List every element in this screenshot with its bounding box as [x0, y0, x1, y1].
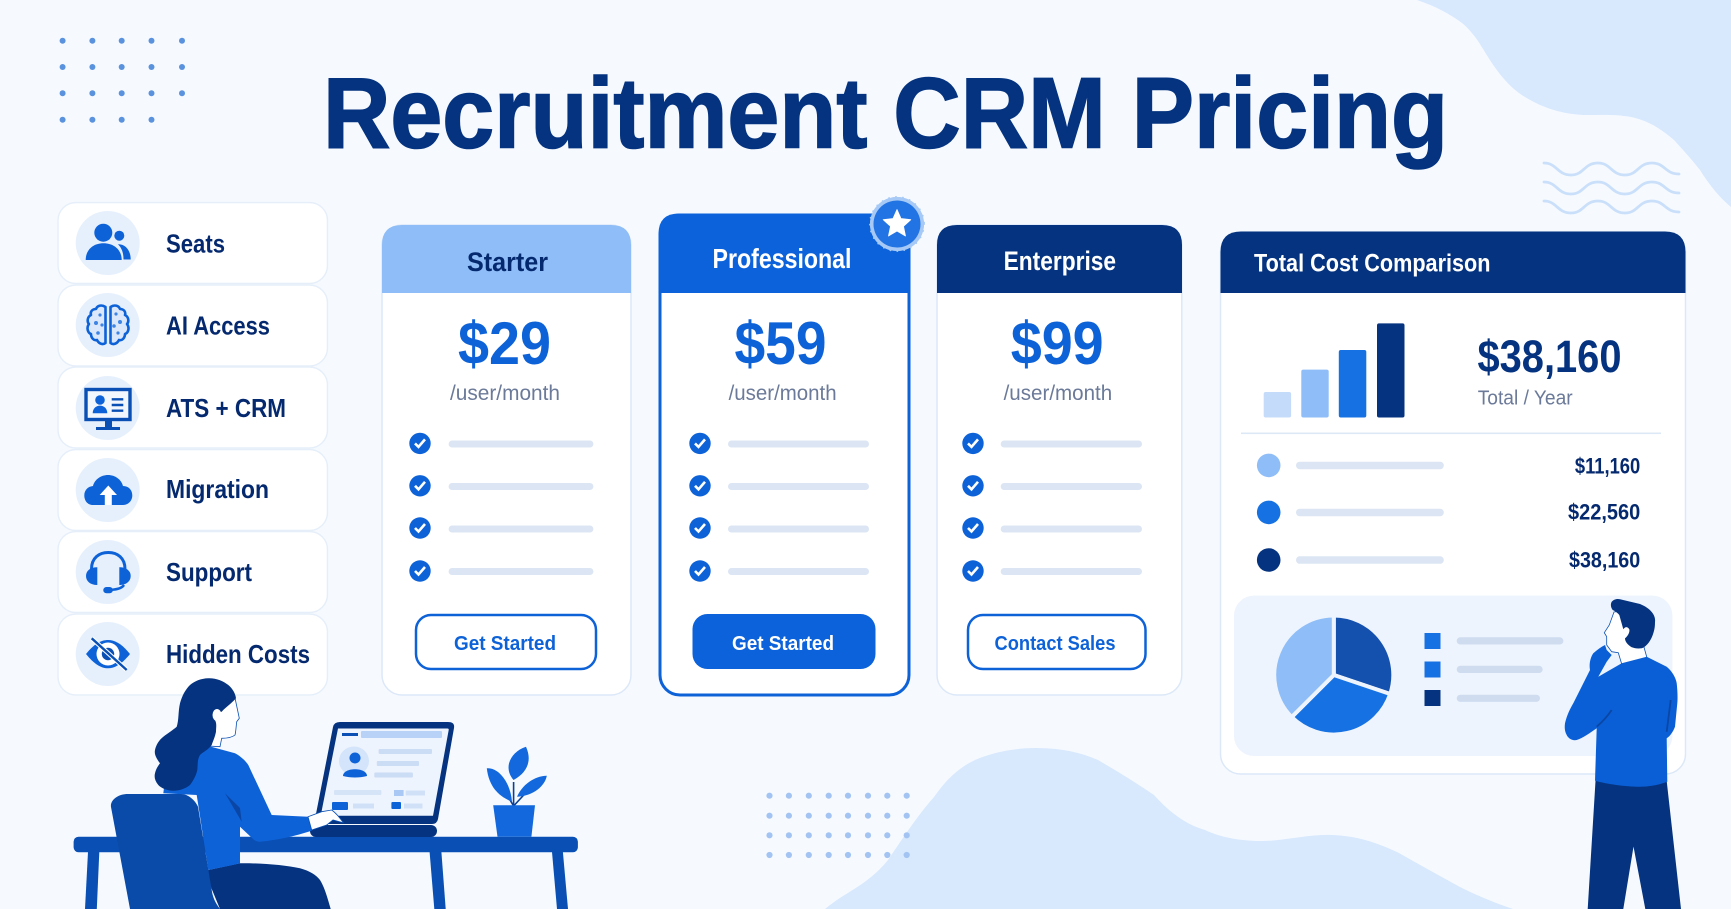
face and neck	[208, 698, 239, 747]
card: Enterprise: /user/month	[1004, 382, 1112, 405]
row: Seats: Seats	[166, 228, 225, 258]
row: AI Access	[58, 285, 328, 366]
row: AI Access: AI Access	[166, 310, 270, 340]
row: Hidden Costs: Hidden Costs	[166, 639, 310, 669]
icon: brain	[88, 306, 128, 344]
decorative dots: top left	[60, 38, 185, 123]
card: Enterprise: $99	[1011, 310, 1104, 377]
icon: people	[86, 224, 131, 260]
pie legend	[1424, 633, 1563, 706]
cost rows: $38,160	[1569, 548, 1640, 573]
row: Support: Support	[166, 557, 252, 587]
inner panel: breakdown	[1234, 596, 1672, 756]
panel: feature list	[58, 202, 328, 695]
row: ATS + CRM: ATS + CRM	[166, 393, 286, 423]
illustration: man thinking	[1565, 599, 1681, 909]
icon: monitor with profile	[86, 390, 130, 430]
panel: Total Cost Comparison: Total Cost Comparison	[1254, 249, 1490, 277]
desk	[74, 837, 578, 909]
feature checks	[689, 433, 869, 582]
total figure: Total / Year	[1478, 387, 1573, 409]
button: Get Started: Get Started	[454, 632, 556, 655]
sweater and arm	[163, 746, 312, 870]
laptop	[310, 722, 454, 837]
neck and face	[1604, 610, 1647, 664]
card: Starter	[382, 225, 631, 695]
decorative waves: top right	[1544, 163, 1679, 213]
button: Get Started: Get Started	[732, 632, 834, 655]
card: Enterprise	[937, 225, 1182, 695]
row: Migration: Migration	[166, 474, 269, 504]
total figure	[1478, 331, 1622, 409]
trousers	[1588, 781, 1681, 909]
card: Starter: Starter	[467, 247, 548, 277]
badge: star	[870, 197, 924, 251]
background blob: bottom	[825, 748, 1513, 909]
card: Professional	[658, 197, 924, 695]
row: ATS + CRM	[58, 367, 328, 448]
button: Contact Sales	[968, 615, 1146, 669]
cost rows: $11,160	[1575, 454, 1640, 479]
trousers	[208, 863, 331, 909]
background blob: top right	[1417, 0, 1731, 207]
sweater folds	[1597, 700, 1671, 732]
hair	[155, 678, 236, 791]
feature checks	[962, 433, 1142, 582]
button: Get Started	[692, 614, 876, 669]
plant	[487, 747, 547, 837]
bar chart	[1264, 323, 1404, 418]
card: Starter: /user/month	[450, 382, 560, 405]
panel: Total Cost Comparison	[1220, 232, 1686, 774]
icon: headset	[86, 552, 131, 593]
sweater and arm	[1565, 645, 1678, 787]
card: Starter: $29	[458, 310, 551, 377]
row: Seats	[58, 202, 328, 284]
row: Migration	[58, 450, 328, 530]
ear	[212, 709, 222, 721]
pie chart	[1274, 615, 1393, 735]
card: Professional: /user/month	[729, 382, 837, 405]
card: Professional: $59	[734, 310, 826, 377]
button: Contact Sales: Contact Sales	[994, 632, 1116, 655]
row: Support	[58, 532, 328, 612]
feature checks	[409, 433, 593, 582]
card: Professional: Professional	[712, 243, 852, 274]
icon: cloud upload	[84, 475, 132, 505]
button: Get Started	[416, 615, 596, 669]
decorative dots: bottom centre	[766, 793, 910, 858]
row: Hidden Costs	[58, 614, 328, 695]
chair	[111, 794, 220, 909]
icon: crossed eye	[86, 638, 130, 670]
sweater fold	[225, 793, 242, 822]
title: Recruitment CRM Pricing	[323, 58, 1448, 170]
hand	[308, 810, 343, 830]
cost rows	[1257, 454, 1640, 573]
card: Enterprise: Enterprise	[1004, 246, 1116, 276]
hair	[1611, 599, 1655, 649]
cost rows: $22,560	[1568, 500, 1640, 525]
illustration: desk and woman at laptop	[74, 678, 578, 909]
total figure: $38,160	[1478, 331, 1622, 382]
woman	[155, 678, 343, 909]
